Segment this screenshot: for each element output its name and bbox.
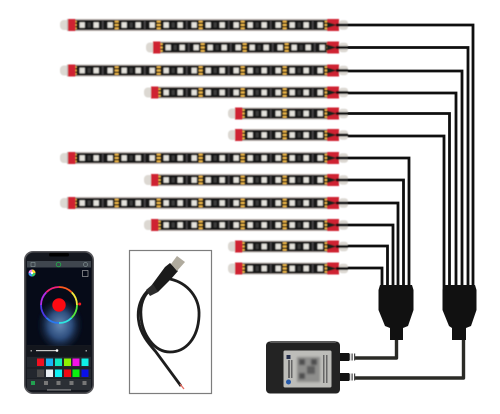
bare wire tips	[180, 384, 184, 389]
colour swatches row 1	[27, 357, 91, 368]
mode buttons row 2	[27, 368, 91, 378]
LED strip 4	[144, 86, 348, 98]
colour wheel icon	[28, 270, 36, 276]
controller label	[284, 350, 332, 388]
left splitter connector	[378, 285, 414, 340]
phone navigation bar	[27, 379, 91, 390]
LED strip 1	[60, 19, 348, 31]
QR code	[297, 357, 320, 382]
cable: left connector to controller	[354, 338, 396, 358]
wires: lower strips to left connector	[346, 158, 409, 290]
accessory frame	[130, 250, 212, 394]
controller box	[266, 341, 340, 394]
LED strip 9	[60, 197, 348, 209]
LED strip 10	[144, 219, 348, 231]
wires: upper strips to right connector	[346, 25, 473, 290]
LED strip 7	[60, 152, 348, 164]
LED strip 8	[144, 174, 348, 186]
cable: right connector to controller	[354, 338, 464, 378]
brightness slider	[27, 346, 91, 356]
LED strip 2	[146, 42, 348, 54]
right splitter connector	[442, 285, 476, 340]
cable wire loop	[141, 279, 199, 352]
ring handle	[78, 302, 81, 306]
cable tail	[138, 289, 181, 386]
strain relief	[146, 284, 158, 296]
phone wallpaper	[27, 267, 91, 345]
moulded boot	[151, 263, 178, 292]
phone	[24, 251, 94, 394]
LED strip 6	[228, 129, 348, 141]
DC power cable	[138, 256, 199, 389]
phone top bar	[27, 261, 91, 268]
LED strip 11	[228, 240, 348, 252]
barrel plug	[171, 256, 185, 271]
label text marks	[288, 355, 328, 383]
LED strip 5	[228, 108, 348, 120]
label logo dots	[286, 355, 290, 359]
controller plug top	[340, 353, 355, 361]
controller plug bottom	[340, 373, 355, 381]
centre red colour dot	[52, 298, 66, 312]
LED strip 12	[228, 262, 348, 274]
colour ring control	[41, 287, 77, 323]
LED strip 3	[60, 64, 348, 76]
